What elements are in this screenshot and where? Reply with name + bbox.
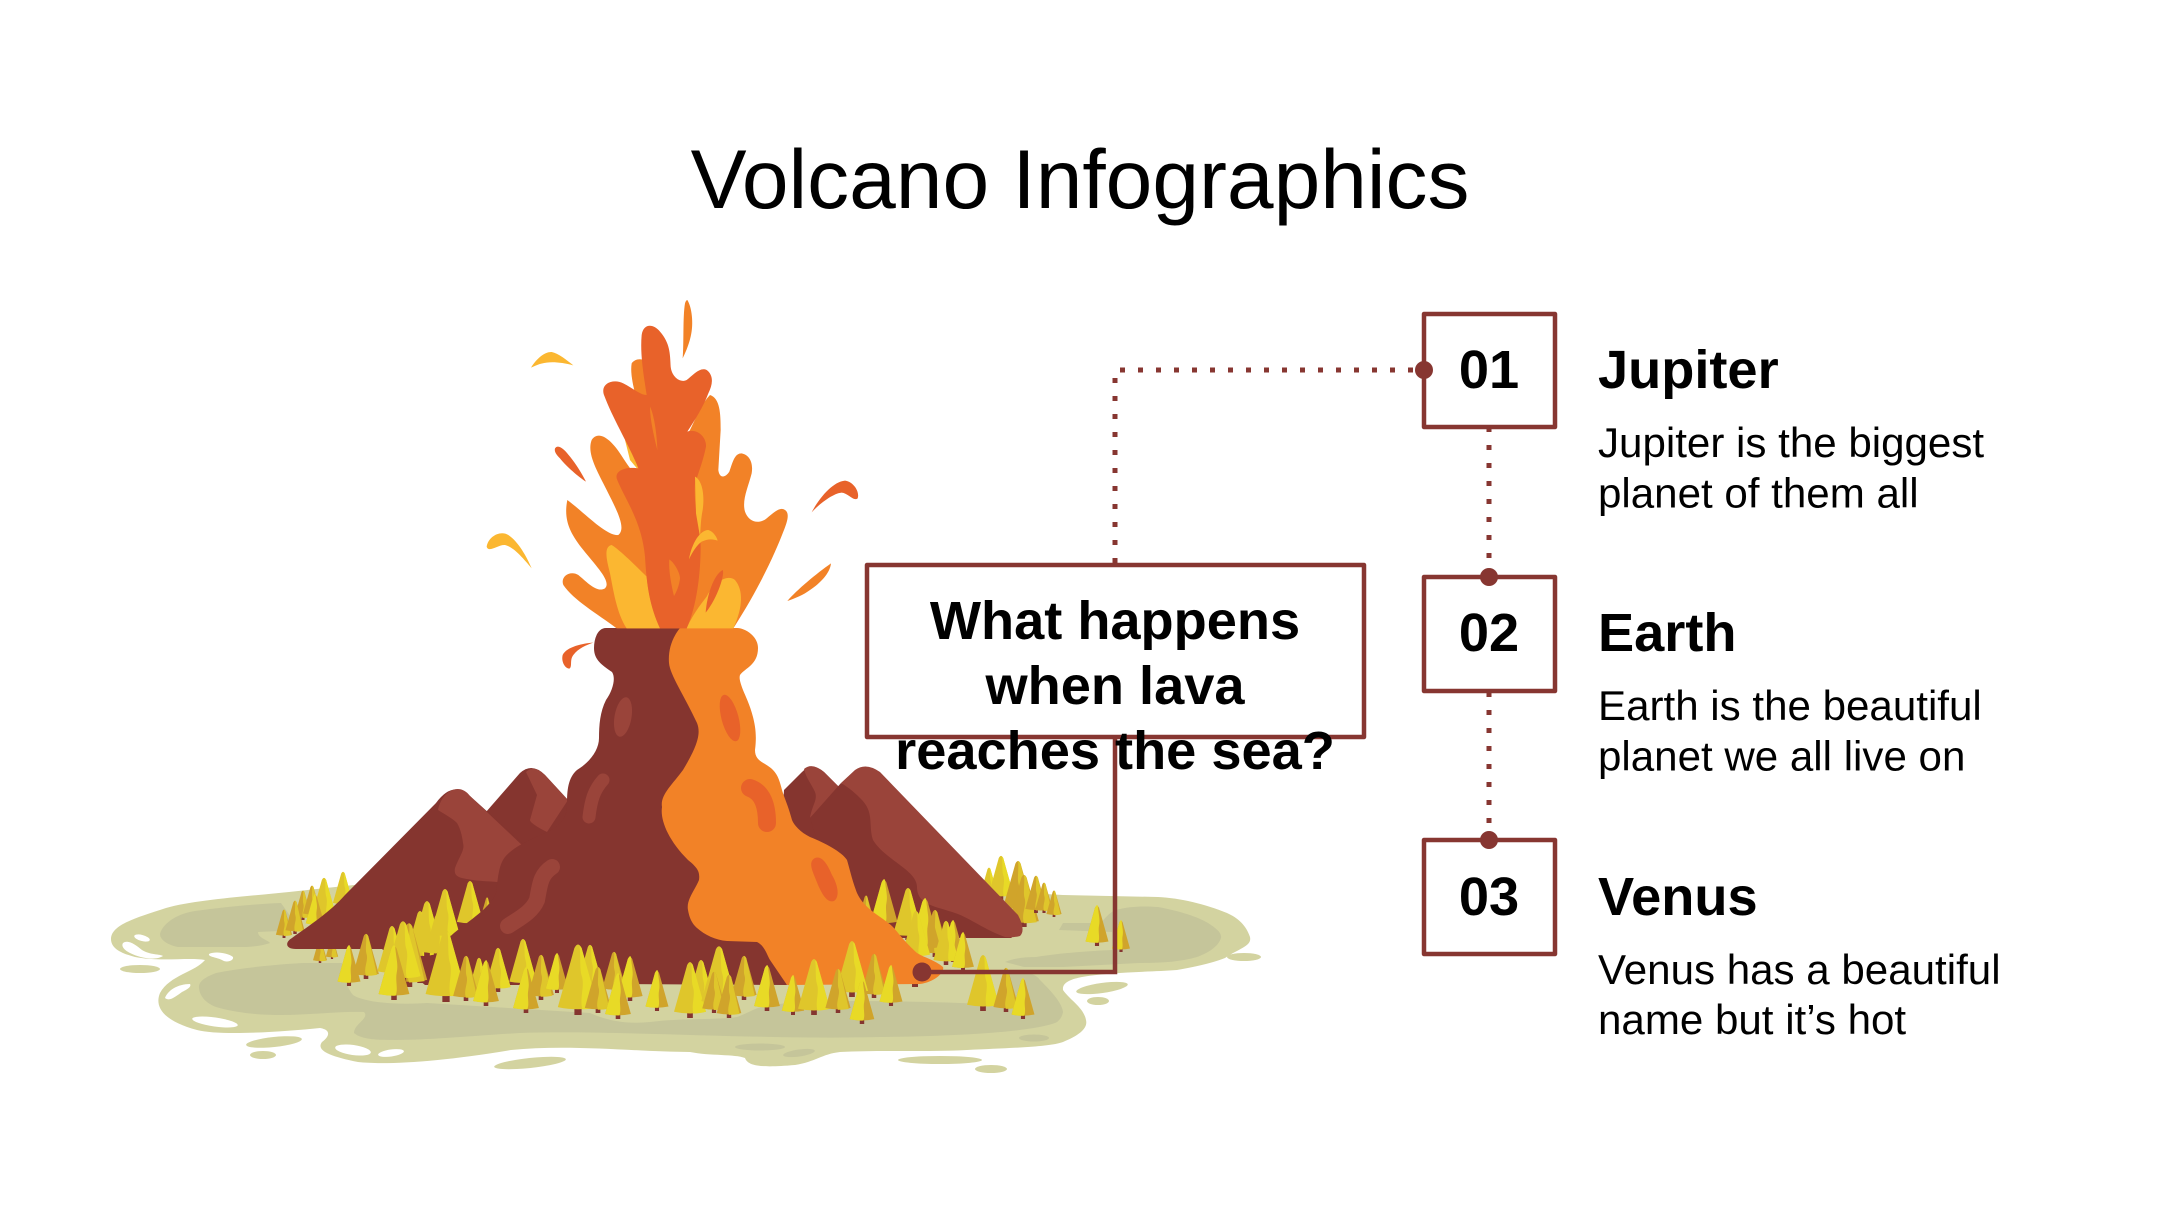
question box: reaches the sea? [895, 721, 1335, 781]
item 03: Venus [1424, 831, 2001, 1043]
front trees [338, 921, 1034, 1024]
illustration: volcano island [111, 300, 1261, 1073]
title: Volcano Infographics [691, 132, 1469, 226]
item 02: Earth: planet we all live on [1598, 732, 1965, 780]
trees between mountains and volcano [406, 879, 974, 971]
item 01: Jupiter: 01 [1459, 340, 1519, 400]
question box [867, 565, 1364, 781]
volcano body [417, 628, 787, 985]
sea [111, 880, 1261, 1073]
connector: 02 to 03 [1486, 692, 1492, 840]
item 01: Jupiter: Jupiter is the biggest [1598, 419, 1984, 466]
question box: when lava [984, 656, 1245, 716]
item 03: Venus: Venus has a beautiful [1598, 946, 2001, 993]
question box: What happens [930, 591, 1300, 651]
item 02: Earth [1424, 568, 1982, 780]
connector: lava to question box [912, 737, 1115, 982]
item 01: Jupiter [1415, 314, 1984, 516]
connector: 01 to 02 [1486, 427, 1492, 577]
item 03: Venus: name but it’s hot [1598, 996, 1906, 1043]
eruption flames [487, 300, 858, 669]
item 01: Jupiter: Jupiter [1598, 340, 1779, 400]
item 02: Earth: Earth is the beautiful [1598, 682, 1982, 729]
item 03: Venus: 03 [1459, 867, 1519, 927]
item 02: Earth: 02 [1459, 603, 1519, 663]
item 02: Earth: Earth [1598, 603, 1737, 663]
mountains [287, 766, 1023, 985]
connector: question box to 01 [1115, 370, 1424, 563]
lava flow [662, 628, 943, 987]
item 01: Jupiter: planet of them all [1598, 470, 1919, 516]
item 03: Venus: Venus [1598, 867, 1758, 927]
back trees [276, 856, 1130, 963]
